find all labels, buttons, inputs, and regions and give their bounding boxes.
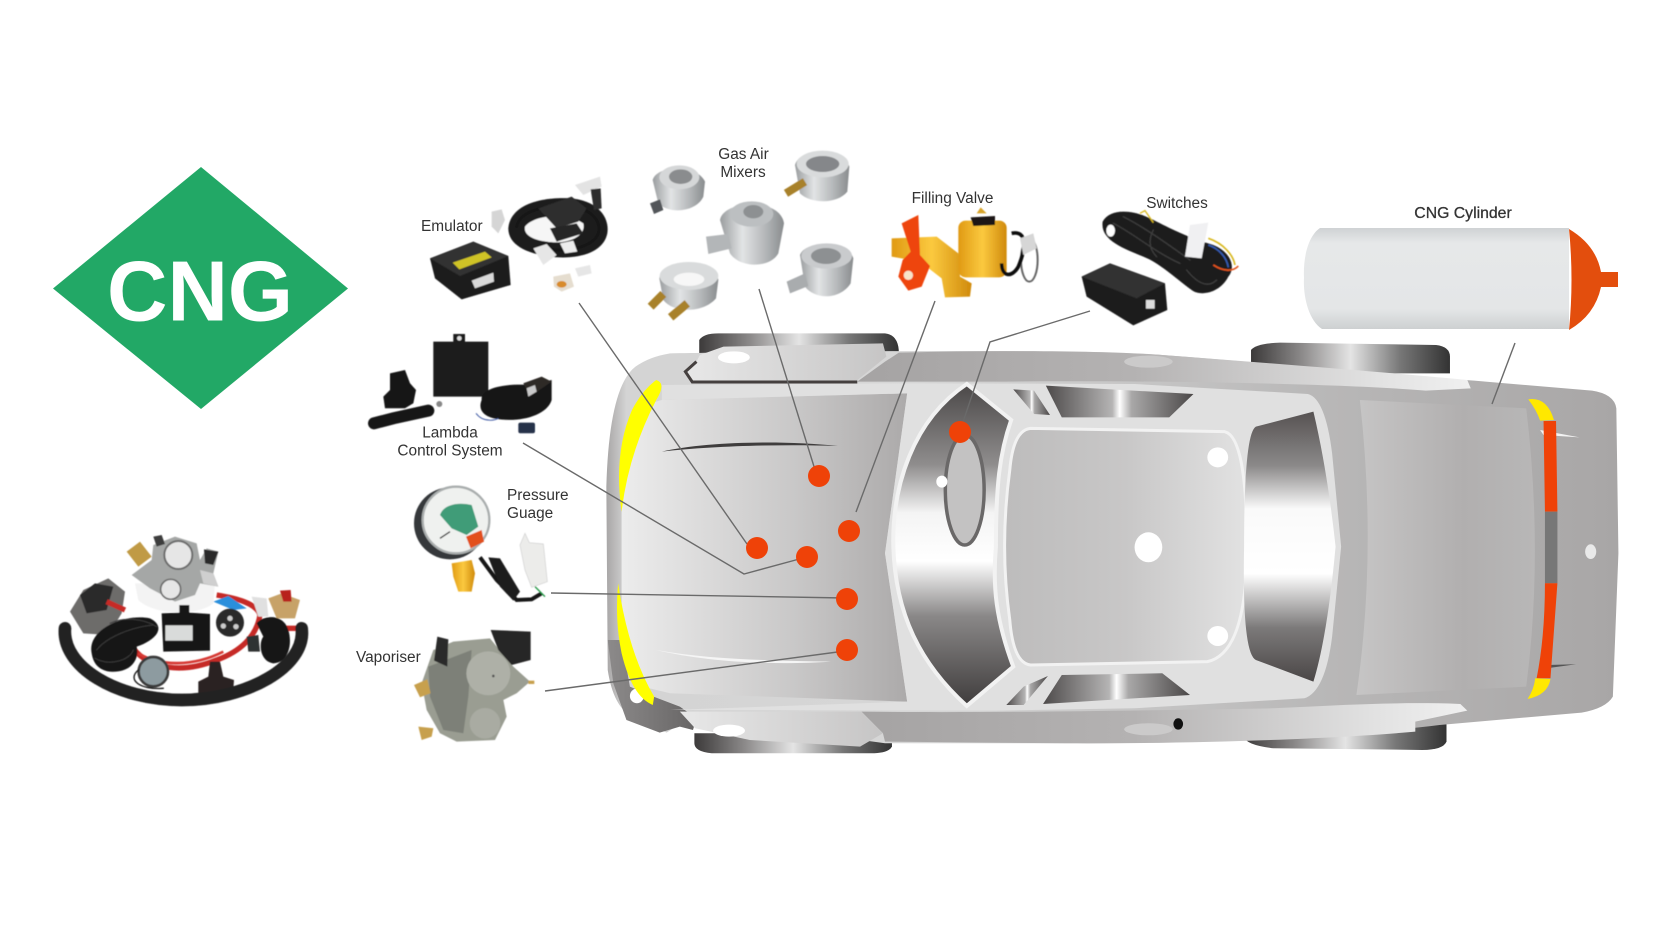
side windows bbox=[1006, 386, 1193, 705]
kit: regulator bbox=[127, 535, 218, 602]
front yellow indicator lights bbox=[617, 380, 661, 705]
photo: emulator bbox=[430, 177, 608, 299]
steering wheel bbox=[945, 435, 984, 545]
lower front fender bbox=[680, 712, 883, 747]
kit: lambda valve bbox=[198, 662, 234, 693]
mixer: bottom left bbox=[651, 262, 718, 317]
CNG logo bbox=[53, 167, 348, 409]
labels: Filling Valve bbox=[912, 190, 993, 207]
photo: vaporiser bbox=[414, 630, 534, 742]
CNG logo: CNG bbox=[107, 244, 293, 340]
labels: Control System bbox=[397, 442, 503, 460]
rear window bbox=[1244, 412, 1336, 682]
emulator: control unit bbox=[430, 242, 511, 299]
labels: Mixers bbox=[720, 164, 766, 181]
wheels bbox=[694, 333, 1450, 753]
photo: switches bbox=[1082, 211, 1238, 325]
labels: Lambda bbox=[422, 424, 478, 442]
car top view with CNG system bbox=[606, 333, 1618, 753]
kit: red hoses bbox=[107, 595, 302, 668]
leader lines bbox=[523, 289, 1515, 691]
mixer: bottom right bbox=[787, 243, 853, 296]
lower sill bbox=[861, 703, 1467, 743]
emulator: wiring harness bbox=[508, 198, 608, 257]
photo: CNG conversion kit bbox=[65, 535, 302, 700]
hood creases bbox=[662, 443, 838, 452]
photo: CNG cylinder bbox=[1304, 228, 1618, 330]
trunk lid bbox=[1356, 400, 1535, 695]
labels: Vaporiser bbox=[356, 649, 421, 666]
kit: blue CNG tag bbox=[213, 596, 247, 610]
hood panel bbox=[622, 393, 907, 702]
mixer: top right bbox=[786, 151, 849, 201]
kit: left wires bbox=[91, 617, 158, 672]
roof bbox=[1005, 428, 1247, 665]
mixer: centre bbox=[706, 201, 784, 265]
rear lights bbox=[1528, 399, 1557, 699]
labels: Switches bbox=[1146, 195, 1208, 212]
kit: bracket and filling valve bbox=[252, 597, 268, 617]
labels: Gas Air bbox=[718, 146, 769, 163]
photo: filling valve bbox=[892, 207, 1038, 297]
kit: bag of fittings bbox=[70, 578, 125, 635]
windscreen bbox=[893, 384, 1013, 706]
cabin frame bbox=[662, 383, 1341, 711]
mixer: top left bbox=[650, 165, 705, 214]
kit: white cup bbox=[135, 583, 215, 612]
labels bbox=[356, 146, 1512, 666]
kit: black hose bbox=[65, 628, 302, 700]
labels: Emulator bbox=[421, 218, 483, 235]
photo: lambda control system bbox=[374, 334, 552, 433]
upper front fender bbox=[685, 343, 886, 381]
car body bbox=[606, 351, 1618, 743]
bumper corner bbox=[608, 640, 696, 733]
kit: gauge bbox=[139, 657, 168, 686]
labels: CNG Cylinder bbox=[1414, 205, 1512, 222]
installation points bbox=[746, 421, 971, 661]
upper sill bbox=[857, 351, 1471, 391]
photo: gas air mixers bbox=[650, 151, 853, 317]
kit: black control box bbox=[162, 605, 210, 652]
kit: round switch bbox=[216, 609, 244, 637]
photo: pressure gauge bbox=[414, 487, 547, 601]
kit: right wires bbox=[257, 617, 290, 663]
labels: Guage bbox=[507, 505, 553, 522]
labels: Pressure bbox=[507, 487, 569, 504]
roof and trim highlights bbox=[1124, 356, 1596, 735]
